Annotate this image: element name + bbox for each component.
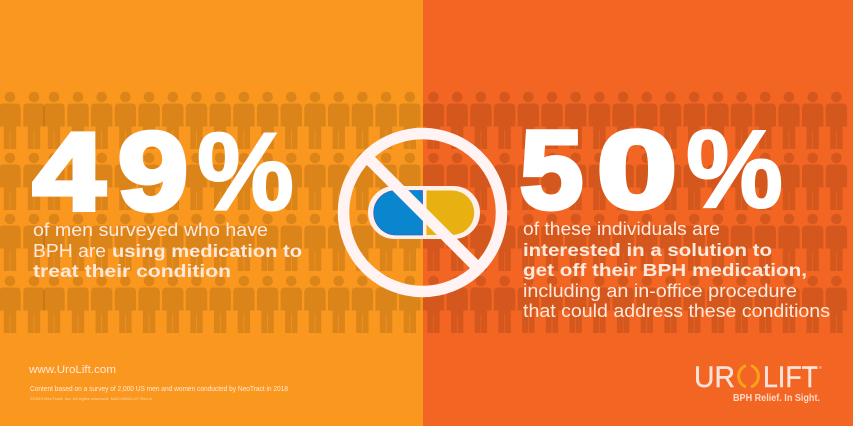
text block: right description: including an in-office procedure xyxy=(523,281,797,301)
panel: right red-orange background xyxy=(423,0,853,426)
statistic: 49%: 4 xyxy=(33,110,105,234)
prohibition slash xyxy=(366,156,479,269)
capsule: yellow half xyxy=(426,190,474,235)
statistic: 50%: 5 xyxy=(520,109,583,232)
statistic: 49%: % xyxy=(197,110,294,234)
survey source note: Content based on a survey of 2,000 US men and women conducted by NeoTract in 2018 xyxy=(30,386,288,393)
text block: right description xyxy=(523,219,830,321)
capsule outline xyxy=(370,188,478,238)
text block: left description: treat their condition xyxy=(33,261,231,281)
statistic: 49% xyxy=(33,110,294,234)
text block: right description: get off their BPH medication, xyxy=(523,260,807,280)
icon: crossed-out medication capsule xyxy=(344,134,502,292)
statistic: 50% xyxy=(520,108,783,232)
copyright line: ©2019 NeoTract, Inc. All rights reserved. MAC00820-07 Rev A xyxy=(30,396,152,401)
text block: right description: of these individuals are xyxy=(523,219,720,239)
capsule: blue half xyxy=(374,190,422,235)
statistic: 50%: 0 xyxy=(597,108,677,232)
registered mark: ® xyxy=(819,365,822,370)
text block: left description: BPH are xyxy=(33,241,106,261)
logo: UroLift xyxy=(694,361,822,404)
text block: left description: of men surveyed who have xyxy=(33,220,268,240)
text block: right description: that could address these conditions xyxy=(523,301,830,321)
text block: right description: interested in a solution to xyxy=(523,240,772,260)
prohibition ring xyxy=(344,134,502,292)
website link: www.UroLift.com xyxy=(28,364,116,376)
logo tagline: BPH Relief. In Sight. xyxy=(733,393,820,404)
logo letters LIFT: LIFT xyxy=(763,361,818,394)
statistic: 50%: % xyxy=(686,108,783,231)
people pattern: rows of human silhouettes xyxy=(0,92,847,333)
logo letter O as orange arcs xyxy=(739,366,758,387)
logo letters UR: UR xyxy=(694,361,735,394)
statistic: 49%: 9 xyxy=(118,110,188,234)
panel: left orange background xyxy=(0,0,423,426)
text block: left description xyxy=(33,220,302,281)
text block: left description: using medication to xyxy=(112,241,302,261)
